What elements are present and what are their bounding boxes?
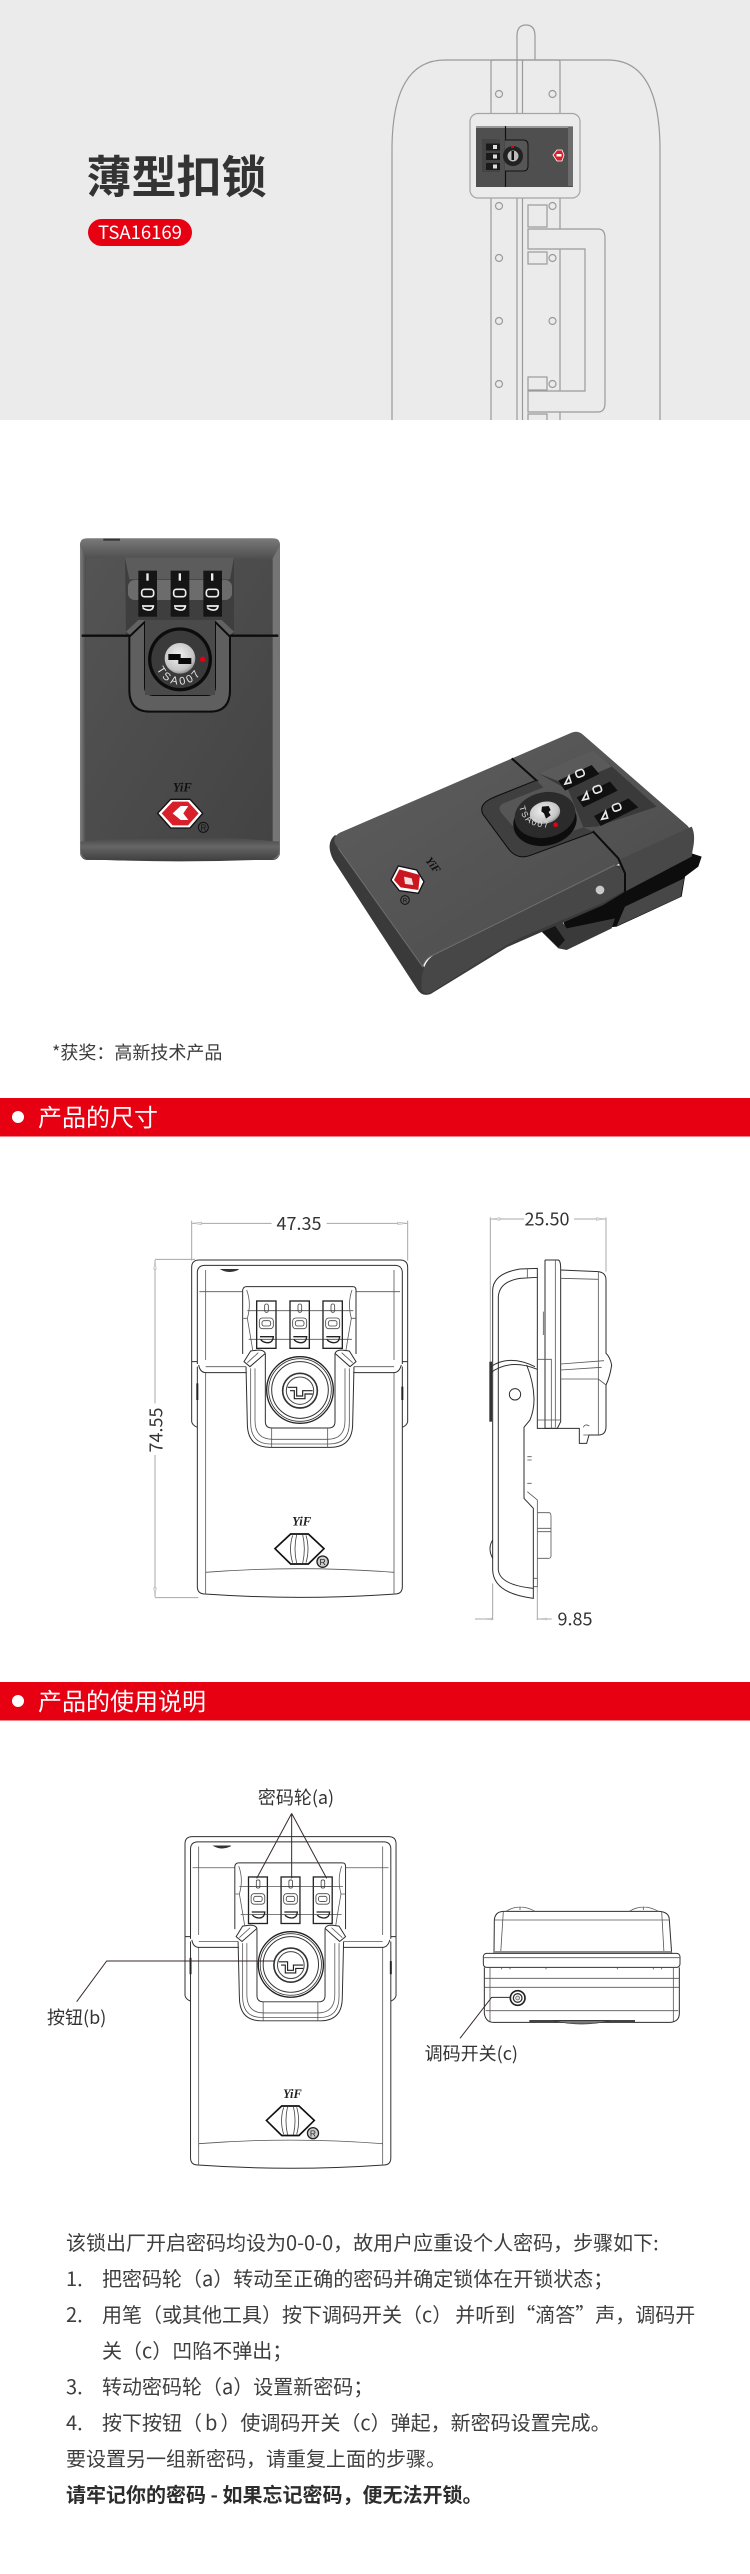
brand: YiF xyxy=(292,1515,312,1529)
model badge: TSA16169 xyxy=(98,219,182,245)
height value: 74.55 xyxy=(142,1408,168,1452)
instruction drawing: back view xyxy=(460,1907,680,2038)
instruction drawing: front view xyxy=(77,1813,396,2168)
key cylinder xyxy=(509,792,581,852)
key cylinder xyxy=(258,1932,323,1997)
latch cup xyxy=(129,622,230,712)
lock body xyxy=(80,538,280,860)
leader lines: code wheels xyxy=(257,1813,327,1878)
brand: YiF xyxy=(423,855,443,876)
code wheels xyxy=(558,765,638,826)
TSA diamond logo xyxy=(158,799,208,833)
award note: *获奖：高新技术产品 xyxy=(52,1039,222,1065)
wheel recess xyxy=(538,750,657,827)
code wheels xyxy=(138,571,222,617)
wheel panel xyxy=(235,1863,346,1929)
hero suitcase line drawing xyxy=(392,25,660,420)
seam and latch cup xyxy=(482,758,625,892)
product photo: angled view xyxy=(330,732,702,995)
lock outline xyxy=(185,1837,396,2168)
hero lock in frame xyxy=(470,114,580,198)
instructions text: 请牢记你的密码 - 如果忘记密码，便无法开锁。 xyxy=(66,2479,482,2508)
instructions text: 转动密码轮（a）设置新密码； xyxy=(102,2371,373,2400)
under clip xyxy=(562,853,702,932)
leader line: button xyxy=(77,1961,275,2002)
instructions text: 要设置另一组新密码，请重复上面的步骤。 xyxy=(66,2443,446,2472)
instructions text: 3. xyxy=(66,2371,83,2400)
side of body xyxy=(330,835,625,995)
leader line: switch xyxy=(460,1997,511,2038)
TSA diamond logo: R xyxy=(200,824,206,833)
instructions text: 2. xyxy=(66,2299,83,2328)
hinge pin xyxy=(596,886,604,894)
instructions text: 用笔（或其他工具）按下调码开关（c）并听到“滴答”声，调码开 xyxy=(102,2299,695,2328)
label: reset switch: 调码开关(c) xyxy=(425,2040,518,2066)
width value: 47.35 xyxy=(277,1210,321,1236)
dimension lines xyxy=(154,1221,408,1598)
instructions text: 关（c）凹陷不弹出； xyxy=(102,2335,292,2364)
instructions text: 该锁出厂开启密码均设为0-0-0，故用户应重设个人密码，步骤如下: xyxy=(66,2227,659,2256)
product photo: front view xyxy=(80,538,280,862)
instructions text: 按下按钮（b）使调码开关（c）弹起，新密码设置完成。 xyxy=(102,2407,611,2436)
instructions text: 把密码轮（a）转动至正确的密码并确定锁体在开锁状态； xyxy=(102,2263,613,2292)
label: code wheels: 密码轮(a) xyxy=(258,1784,334,1810)
reset switch xyxy=(510,1991,525,2005)
TSA007 engraving: TSA007 xyxy=(520,805,548,828)
latch cup xyxy=(244,1350,356,1447)
wheel panel xyxy=(243,1287,356,1354)
TSA logo outline xyxy=(266,2106,319,2139)
section band: dimensions: 产品的尺寸 xyxy=(38,1098,158,1133)
section band: dimensions xyxy=(0,1098,750,1136)
section band: instructions: 产品的使用说明 xyxy=(38,1682,206,1717)
brand: YiF xyxy=(173,780,192,794)
TSA logo outline: R xyxy=(320,1557,326,1567)
upper panel xyxy=(125,557,234,637)
TSA logo outline xyxy=(275,1534,328,1567)
key cylinder xyxy=(148,627,212,691)
TSA logo xyxy=(391,866,424,904)
lock outline xyxy=(192,1260,408,1597)
right block xyxy=(618,827,694,892)
thickness value: 9.85 xyxy=(558,1605,592,1631)
dimension drawing: front view xyxy=(142,1210,408,1598)
side outline xyxy=(489,1260,612,1598)
TSA007 engraving: TSA007 xyxy=(158,665,198,685)
hero background xyxy=(0,0,750,420)
brand: YiF xyxy=(283,2087,302,2101)
dimension drawing: side view xyxy=(475,1205,612,1631)
instructions text xyxy=(66,2227,695,2508)
section band: instructions xyxy=(0,1682,750,1720)
seam xyxy=(82,632,278,639)
box outline xyxy=(483,1907,680,2024)
latch cup xyxy=(236,1925,346,2021)
key cylinder xyxy=(267,1357,333,1423)
TSA logo: R xyxy=(403,897,408,904)
TSA logo outline: R xyxy=(310,2128,316,2138)
dimension lines xyxy=(475,1217,606,1620)
title: 薄型扣锁 xyxy=(86,141,267,206)
width value: 25.50 xyxy=(525,1205,569,1231)
instructions text: 4. xyxy=(66,2407,83,2436)
instructions text: 1. xyxy=(66,2263,83,2292)
label: button: 按钮(b) xyxy=(47,2004,106,2030)
top face xyxy=(334,732,689,967)
